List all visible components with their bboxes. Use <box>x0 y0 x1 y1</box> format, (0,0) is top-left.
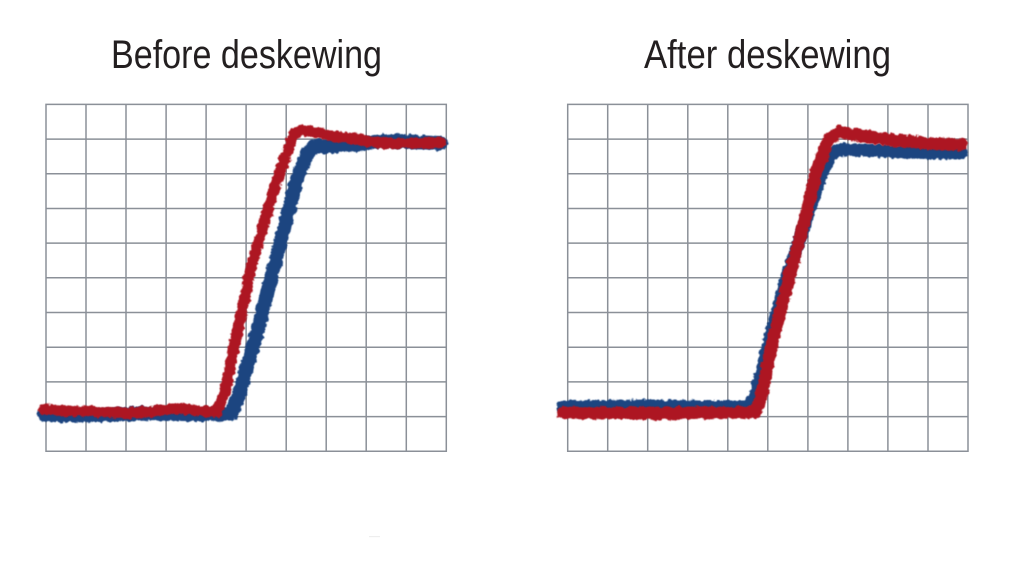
blue waveform, after <box>563 150 961 407</box>
title: after deskewing: After deskewing <box>644 33 891 77</box>
faint speck <box>369 536 380 537</box>
blue waveform, before <box>44 140 441 416</box>
red waveform, after <box>563 132 961 414</box>
chart: before deskewing <box>44 104 446 451</box>
title: before deskewing: Before deskewing <box>111 33 382 77</box>
red waveform, before <box>44 130 441 413</box>
chart: after deskewing <box>563 104 968 451</box>
